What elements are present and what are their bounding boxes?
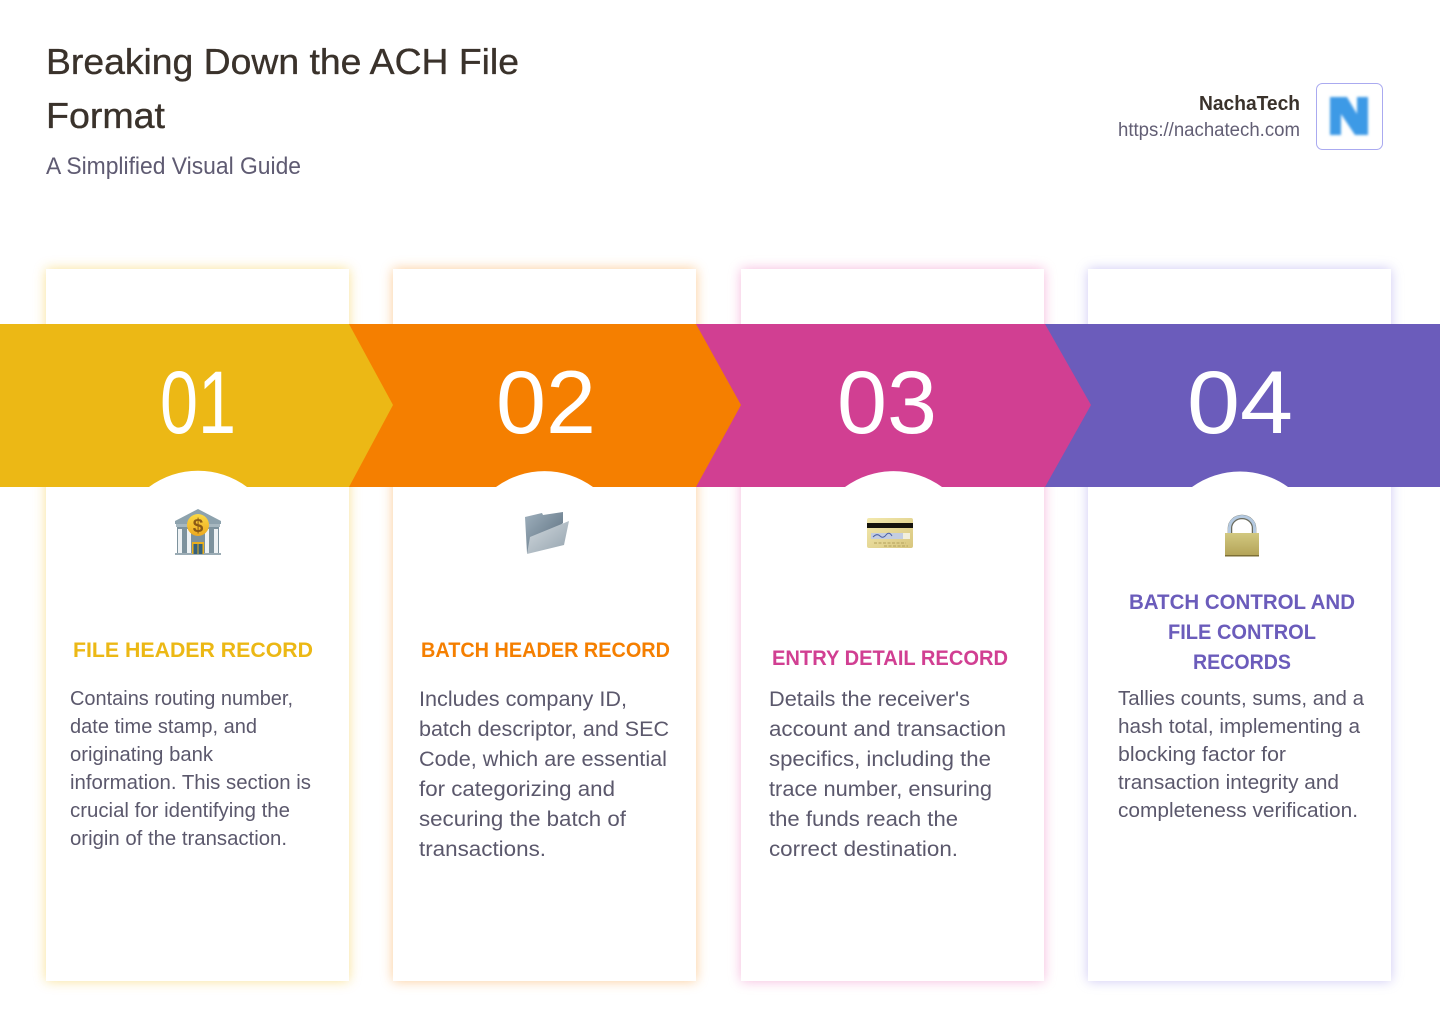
icon: bank — [175, 509, 221, 555]
arrow: step 03 — [696, 324, 1091, 487]
brand url: https://nachatech.com — [1118, 120, 1300, 141]
text block: account and transaction — [769, 717, 1006, 741]
arrow: step 04 — [1045, 324, 1440, 487]
heading: ENTRY DETAIL RECORD — [772, 646, 1008, 670]
text block: origin of the transaction. — [70, 828, 287, 850]
heading: BATCH HEADER RECORD — [421, 638, 670, 662]
heading: FILE CONTROL — [1168, 620, 1316, 644]
icon: folder — [525, 512, 569, 554]
heading: BATCH CONTROL AND — [1129, 590, 1355, 614]
title: Format — [46, 95, 165, 136]
text block: hash total, implementing a — [1118, 716, 1361, 738]
text block: crucial for identifying the — [70, 800, 290, 822]
text block: Code, which are essential — [419, 747, 667, 771]
text block: transactions. — [419, 837, 546, 861]
brand name: NachaTech — [1199, 93, 1300, 115]
subtitle: A Simplified Visual Guide — [46, 153, 301, 180]
text block — [769, 687, 1006, 861]
panel: batch header record — [393, 269, 696, 981]
text block: specifics, including the — [769, 747, 991, 771]
text block: completeness verification. — [1118, 800, 1358, 822]
text block — [419, 687, 669, 861]
panel: file header record — [46, 269, 349, 981]
text block: blocking factor for — [1118, 744, 1286, 766]
icon: credit card — [867, 518, 913, 548]
arrow: step 02: 02 — [496, 352, 596, 452]
text block: correct destination. — [769, 837, 958, 861]
text block: Includes company ID, — [419, 687, 627, 711]
text block: Tallies counts, sums, and a — [1118, 688, 1365, 710]
panel: entry detail record — [741, 269, 1044, 981]
heading — [1129, 590, 1355, 674]
icon: bank: $ — [193, 516, 204, 537]
arrow: step 04: 04 — [1187, 352, 1293, 452]
text block: batch descriptor, and SEC — [419, 717, 669, 741]
text block: date time stamp, and — [70, 716, 257, 738]
text block: transaction integrity and — [1118, 772, 1339, 794]
title: Breaking Down the ACH File — [46, 41, 519, 82]
text block: securing the batch of — [419, 807, 626, 831]
title — [46, 41, 519, 136]
arrow: step 03: 03 — [837, 352, 937, 452]
text block: the funds reach the — [769, 807, 958, 831]
text block: Details the receiver's — [769, 687, 970, 711]
text block: originating bank — [70, 744, 214, 766]
text block — [1118, 688, 1365, 822]
arrow: step 01: 01 — [160, 352, 236, 452]
text block: for categorizing and — [419, 777, 615, 801]
arrow: step 01 — [0, 324, 393, 487]
text block — [70, 688, 311, 850]
icon: logo — [1316, 84, 1382, 150]
text block: trace number, ensuring — [769, 777, 992, 801]
panel: batch control and file control records — [1088, 269, 1391, 981]
text block: Contains routing number, — [70, 688, 293, 710]
icon: padlock — [1225, 516, 1259, 556]
heading: FILE HEADER RECORD — [73, 638, 313, 662]
arrow: step 02 — [349, 324, 741, 487]
brand block — [1118, 84, 1382, 150]
text block: information. This section is — [70, 772, 311, 794]
heading: RECORDS — [1193, 650, 1291, 674]
